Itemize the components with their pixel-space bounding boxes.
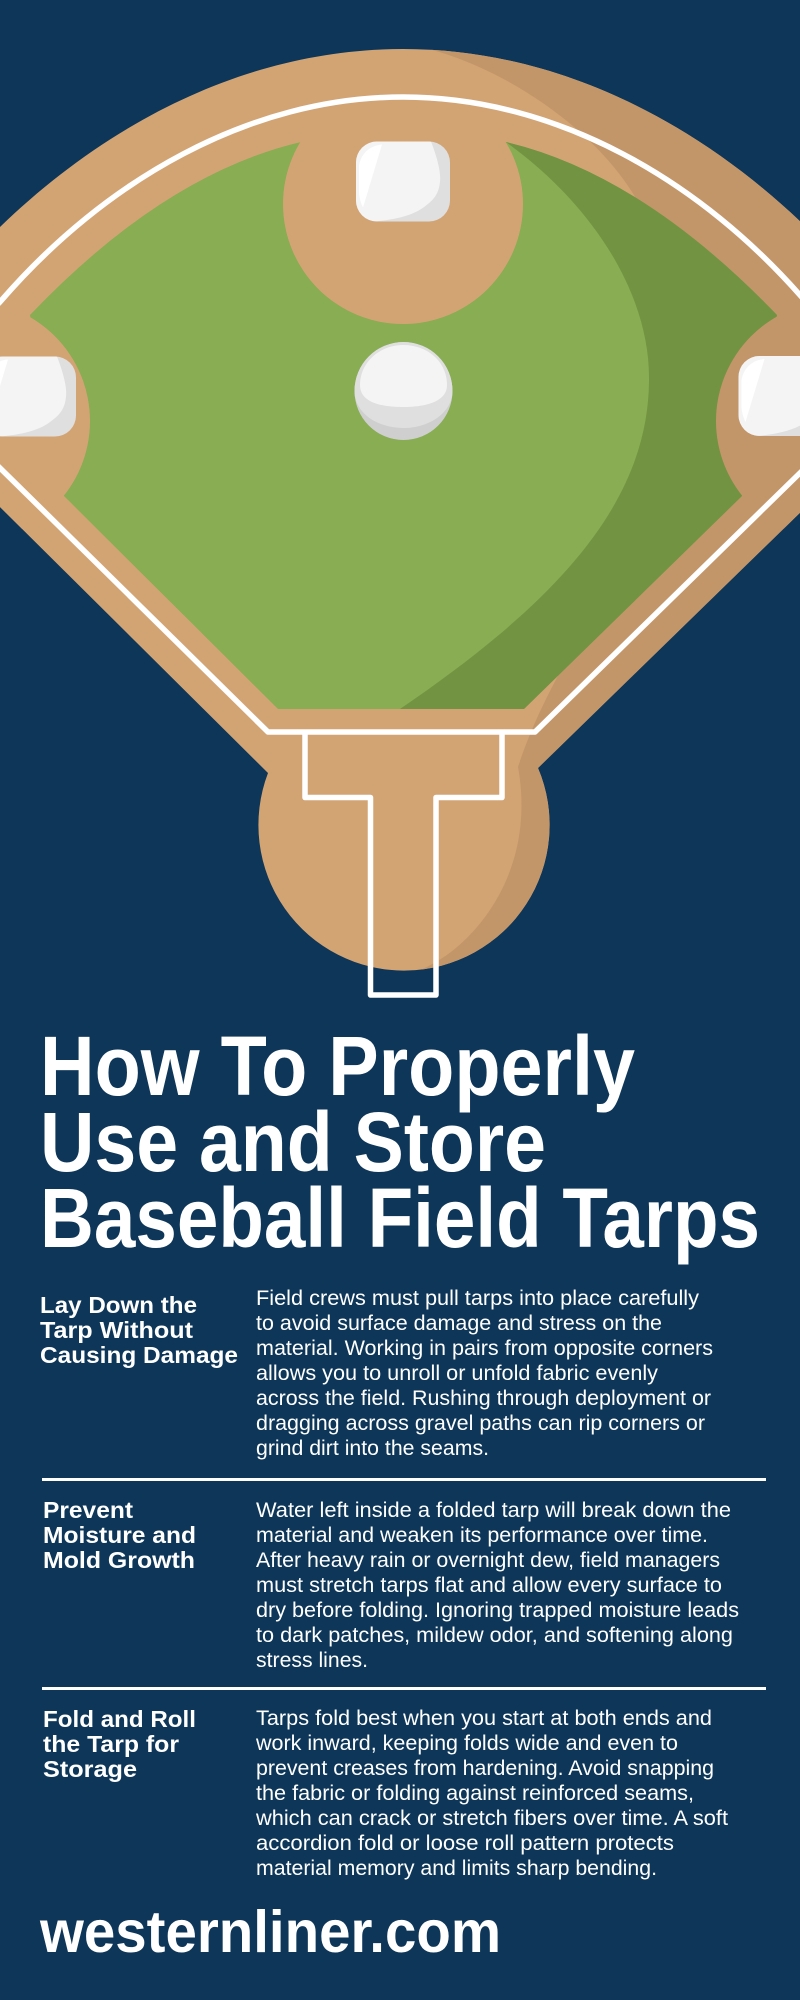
section 2 heading xyxy=(43,1497,196,1573)
section 3 body: prevent creases from hardening. Avoid snapping xyxy=(256,1757,714,1780)
pitcher's mound ball xyxy=(354,342,452,440)
section 3 body: work inward, keeping folds wide and even to xyxy=(255,1732,678,1755)
section 3 heading: Fold and Roll xyxy=(43,1706,196,1732)
section 3 body xyxy=(255,1707,728,1880)
right base xyxy=(738,356,800,436)
white foul line arc xyxy=(0,97,800,308)
section 2 body: stress lines. xyxy=(256,1649,368,1672)
section 1 body: grind dirt into the seams. xyxy=(256,1437,489,1460)
section 3 body: accordion fold or loose roll pattern protects xyxy=(256,1832,674,1855)
section 1 body: to avoid surface damage and stress on the xyxy=(256,1312,662,1335)
divider xyxy=(42,1478,766,1481)
illustration: baseball field xyxy=(0,40,800,1000)
third base dirt circle xyxy=(716,316,800,529)
section 1 body: Field crews must pull tarps into place carefully xyxy=(256,1287,700,1310)
section 2 body: After heavy rain or overnight dew, field managers xyxy=(256,1549,720,1572)
white base lines and home box xyxy=(0,465,800,995)
section 2 body: material and weaken its performance over time. xyxy=(256,1524,708,1547)
section 1 body xyxy=(256,1287,713,1460)
section 2 heading: Prevent xyxy=(43,1497,133,1523)
section 2 body xyxy=(256,1499,739,1672)
section 3 heading: the Tarp for xyxy=(43,1731,179,1757)
footer website: westernliner.com xyxy=(39,1899,501,1965)
section 2 body: dry before folding. Ignoring trapped moisture leads xyxy=(256,1599,739,1622)
section 3 heading xyxy=(43,1706,196,1782)
first base dirt circle xyxy=(0,318,90,529)
section 3 body: which can crack or stretch fibers over time. A soft xyxy=(255,1807,728,1830)
section 1 body: material. Working in pairs from opposite corners xyxy=(256,1337,713,1360)
section 2 body: must stretch tarps flat and allow every surface to xyxy=(256,1574,722,1597)
section 2 heading: Mold Growth xyxy=(43,1547,195,1573)
section 1 body: across the field. Rushing through deployment or xyxy=(256,1387,711,1410)
section 1 heading: Tarp Without xyxy=(40,1317,193,1343)
section 3 body: material memory and limits sharp bending. xyxy=(256,1857,657,1880)
title xyxy=(40,1019,760,1265)
top base xyxy=(356,142,450,222)
section 3 body: the fabric or folding against reinforced seams, xyxy=(256,1782,694,1805)
section 1 heading: Lay Down the xyxy=(40,1292,197,1318)
divider xyxy=(42,1687,766,1690)
left base xyxy=(0,356,76,436)
section 1 body: allows you to unroll or unfold fabric evenly xyxy=(256,1362,659,1385)
outfield grass xyxy=(30,142,777,709)
section 2 heading: Moisture and xyxy=(43,1522,196,1548)
infield dirt xyxy=(0,40,800,1000)
section 3 heading: Storage xyxy=(43,1756,137,1782)
title: How To Properly xyxy=(40,1019,635,1113)
section 2 body: Water left inside a folded tarp will break down the xyxy=(256,1499,731,1522)
second base dirt circle xyxy=(283,84,523,324)
section 1 body: dragging across gravel paths can rip corners or xyxy=(256,1412,705,1435)
section 3 body: Tarps fold best when you start at both ends and xyxy=(256,1707,712,1730)
section 1 heading xyxy=(40,1292,238,1368)
section 2 body: to dark patches, mildew odor, and softening along xyxy=(256,1624,733,1647)
section 1 heading: Causing Damage xyxy=(40,1342,238,1368)
title: Use and Store xyxy=(40,1095,546,1189)
